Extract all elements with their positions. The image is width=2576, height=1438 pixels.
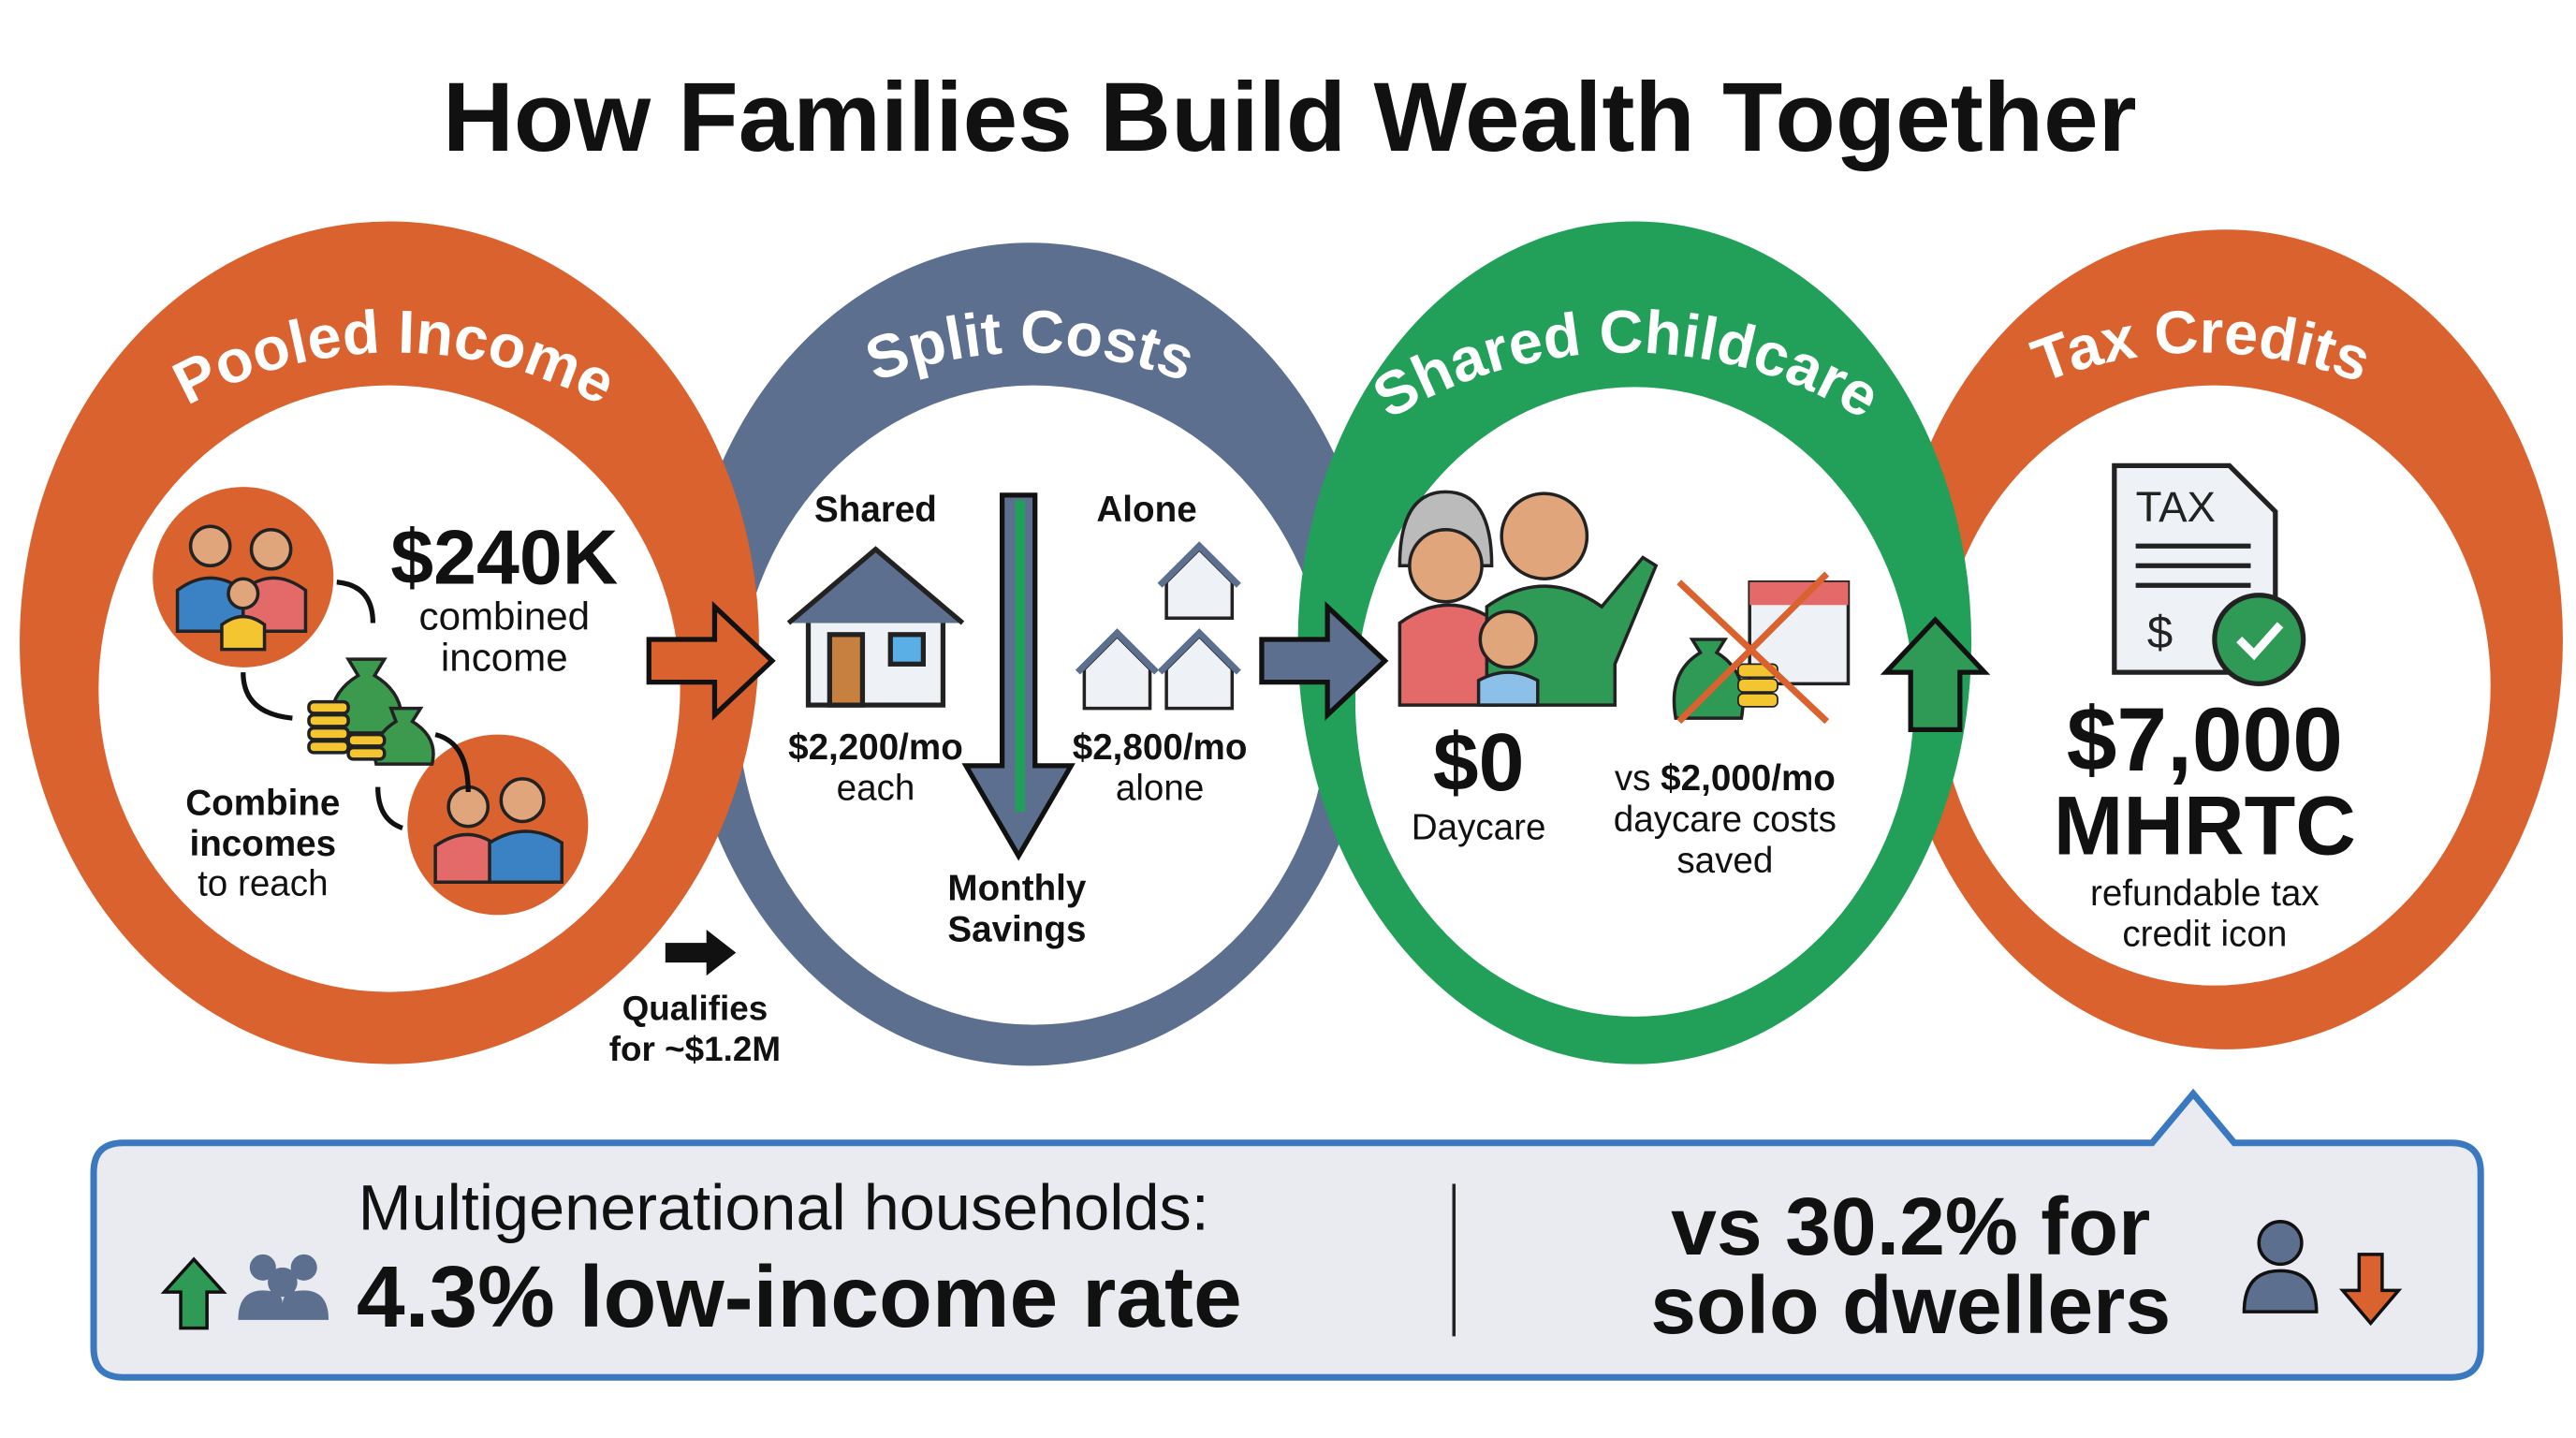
text: $0 daycare: saved: [1676, 841, 1773, 881]
text: cost figures: $2,800/mo: [1073, 727, 1247, 768]
panel: bottom stats callout: [94, 1093, 2481, 1377]
text: cost figures: alone: [1116, 769, 1204, 809]
text: multigenerational rate: [357, 1173, 1242, 1345]
icon: tax document: [2115, 465, 2304, 683]
text: cost figures: $2,200/mo: [788, 727, 963, 768]
text: $7,000 MHRTC: refundable tax: [2090, 873, 2320, 914]
text: shared / alone labels: Shared: [814, 490, 937, 530]
arrow: green up: [1886, 620, 1984, 729]
arrow: orange: [649, 607, 772, 715]
text: $240K combined income: $240K: [390, 515, 618, 600]
icon: money bags: [309, 659, 433, 764]
text: cost figures: Savings: [947, 909, 1086, 949]
panel: shared childcare circle: Shared Childcare: [1375, 309, 1874, 415]
text: $0 daycare: daycare costs: [1614, 800, 1837, 840]
text: qualifies: [609, 989, 781, 1068]
text: $7,000 MHRTC: MHRTC: [2054, 779, 2356, 872]
icon: tax document: $: [2147, 608, 2173, 658]
text: solo dwellers: vs 30.2% for: [1671, 1181, 2150, 1272]
text: combine incomes: to reach: [198, 863, 329, 903]
text: cost figures: each: [837, 769, 915, 809]
icon: tax document: TAX: [2136, 483, 2216, 531]
text: $7,000 MHRTC: [2054, 690, 2356, 955]
panel: shared childcare circle: [1297, 221, 1971, 1064]
icon: family group 2: [407, 735, 588, 915]
text: $240K combined income: [390, 515, 618, 679]
panel: pooled income circle: Pooled Income: [172, 309, 609, 404]
text: multigenerational rate: Multigenerational households:: [359, 1173, 1209, 1244]
icon: crossed daycare cost: [1674, 574, 1848, 722]
text: $0 daycare: [1412, 716, 1837, 881]
arrow: small black: [666, 930, 736, 976]
icon: alone houses: [1077, 546, 1238, 709]
text: $0 daycare: vs $2,000/mo: [1615, 758, 1836, 799]
text: combine incomes: Combine: [185, 783, 340, 823]
text: $0 daycare: $0: [1433, 716, 1524, 808]
text: $240K combined income: combined: [419, 594, 590, 638]
text: $0 daycare: Daycare: [1412, 808, 1545, 848]
icon: green arrow and people: [165, 1255, 329, 1328]
icon: person and down arrow: [2244, 1222, 2398, 1323]
text: combine incomes: [185, 783, 340, 903]
arrow: monthly savings down: [966, 495, 1071, 856]
text: cost figures: [788, 727, 1247, 949]
icon: grandparents with baby: [1399, 492, 1656, 705]
text: multigenerational rate: 4.3% low-income rate: [357, 1248, 1242, 1345]
text: cost figures: Monthly: [947, 869, 1087, 909]
text: $7,000 MHRTC: credit icon: [2122, 915, 2287, 955]
arrows: income flow: [243, 582, 468, 828]
text: $7,000 MHRTC: $7,000: [2067, 690, 2343, 790]
panel: pooled income circle: [20, 221, 759, 1064]
arrow: slate: [1262, 607, 1385, 715]
panel: split costs circle: Split Costs: [868, 311, 1191, 380]
text: solo dwellers: solo dwellers: [1650, 1259, 2171, 1351]
text: shared / alone labels: Alone: [1096, 490, 1197, 530]
text: qualifies: for ~$1.2M: [609, 1030, 781, 1068]
panel: tax credits circle: [1930, 229, 2563, 1049]
icon: family group 1: [153, 487, 333, 668]
text: combine incomes: incomes: [190, 824, 336, 864]
panel: split costs circle: [717, 242, 1339, 1065]
icon: shared house: [788, 550, 962, 705]
text: qualifies: Qualifies: [622, 989, 768, 1027]
text: $240K combined income: income: [441, 635, 568, 679]
text: shared / alone labels: [814, 490, 1197, 530]
text: solo dwellers: [1650, 1181, 2171, 1351]
panel: tax credits circle: Tax Credits: [2028, 311, 2366, 379]
title: How Families Build Wealth Together: [443, 63, 2137, 172]
